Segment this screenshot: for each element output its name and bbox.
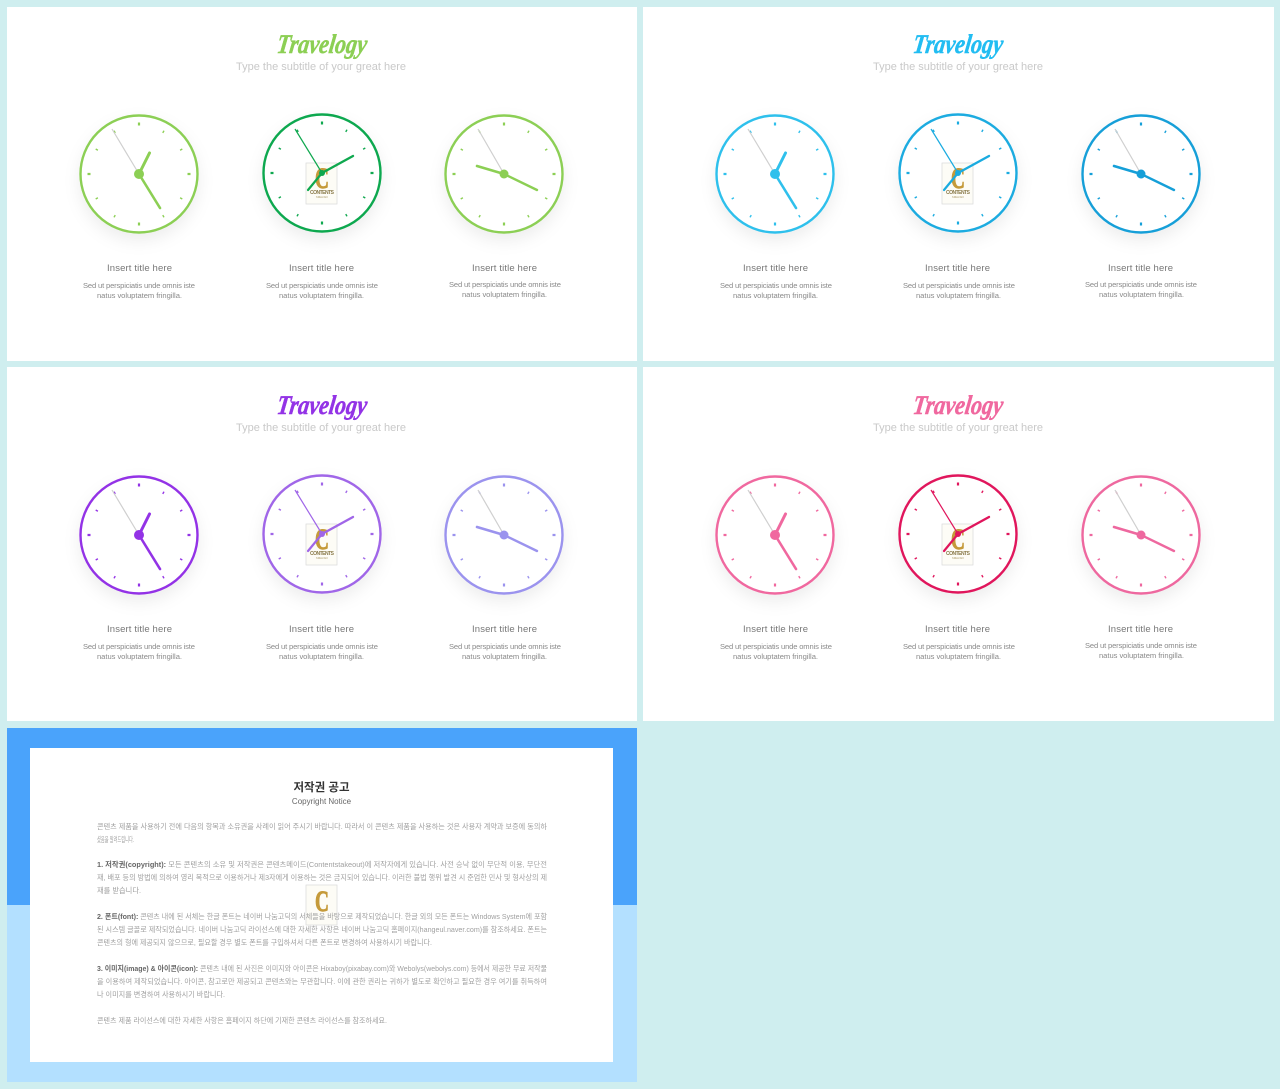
clock 2 text: natus voluptatem fringilla. xyxy=(916,291,1001,300)
clock 3 text xyxy=(1085,280,1197,299)
clock 1 xyxy=(80,116,198,232)
title: Travelogy xyxy=(275,390,370,420)
copyright heading: 저작권 공고 xyxy=(293,780,350,794)
intro paragraph xyxy=(97,821,547,844)
logo watermark: CONTENTS xyxy=(310,551,335,557)
logo watermark xyxy=(942,523,973,565)
clock 3 text xyxy=(449,642,561,661)
clock 3 text: natus voluptatem fringilla. xyxy=(462,290,547,299)
clock 1 label: Insert title here xyxy=(107,624,172,635)
copyright subheading: Copyright Notice xyxy=(292,797,352,806)
clock 3 label: Insert title here xyxy=(472,263,537,274)
section 3: image and icon xyxy=(97,963,547,999)
clock 1 text: Sed ut perspiciatis unde omnis iste xyxy=(83,642,195,651)
clock 1 label: Insert title here xyxy=(743,624,808,635)
clock 1 text: natus voluptatem fringilla. xyxy=(97,652,182,661)
logo watermark: C xyxy=(315,162,329,195)
panel: green clocks xyxy=(7,7,637,361)
logo watermark: C xyxy=(315,523,329,556)
clock 3 text xyxy=(449,280,561,299)
clock 3 text: natus voluptatem fringilla. xyxy=(462,652,547,661)
clock 3 xyxy=(446,116,562,232)
panel: copyright notice xyxy=(7,728,637,1082)
clock 2 text xyxy=(266,642,378,661)
section 3: image and icon: 나 이미지를 변경하여 사용하시기 바랍니다. xyxy=(97,989,225,999)
clock 2 text: natus voluptatem fringilla. xyxy=(279,291,364,300)
clock 3 label: Insert title here xyxy=(472,624,537,635)
clock 2 label: Insert title here xyxy=(925,263,990,274)
section 3: image and icon: 을 이용하여 제작되었습니다. 아이콘, 참고로만 제공되고 콘텐츠와는 무관합니다. 이에 관한 권리는 귀하가 별도로 확인하고 필요한 경우 여기를 취득하여 xyxy=(97,976,547,986)
clock 3 text: natus voluptatem fringilla. xyxy=(1099,290,1184,299)
clock 1 text: natus voluptatem fringilla. xyxy=(733,652,818,661)
clock 1 text xyxy=(83,642,195,661)
clock 1 text: natus voluptatem fringilla. xyxy=(733,291,818,300)
clock 1 text xyxy=(83,281,195,300)
clock 1 label: Insert title here xyxy=(743,263,808,274)
clock 1 text: Sed ut perspiciatis unde omnis iste xyxy=(720,642,832,651)
clock 3 xyxy=(1082,476,1200,594)
panel: purple clocks xyxy=(7,367,637,721)
title: Travelogy xyxy=(911,390,1006,420)
logo watermark: MAIL LOGO xyxy=(316,556,329,560)
clock 1 text xyxy=(720,642,832,661)
section 2: font xyxy=(97,911,547,947)
intro paragraph: 콘텐츠 제품을 사용하기 전에 다음의 항목과 소유권을 사례이 읽어 주시기 바랍니다. 따라서 이 콘텐츠 제품을 사용하는 것은 사용자 계약과 보증에 동의하 xyxy=(97,821,547,831)
clock 2 text: Sed ut perspiciatis unde omnis iste xyxy=(266,281,378,290)
clock 3 text: Sed ut perspiciatis unde omnis iste xyxy=(1085,641,1197,650)
clock 3 text xyxy=(1085,641,1197,660)
clock 1 text: Sed ut perspiciatis unde omnis iste xyxy=(720,281,832,290)
subtitle: Type the subtitle of your great here xyxy=(236,422,406,434)
clock 2 text: Sed ut perspiciatis unde omnis iste xyxy=(266,642,378,651)
logo watermark: CONTENTS xyxy=(946,551,971,557)
clock 2 xyxy=(264,476,380,592)
clock 2 text: natus voluptatem fringilla. xyxy=(279,652,364,661)
clock 1 text xyxy=(720,281,832,300)
clock 2 xyxy=(900,476,1016,592)
logo watermark: MAIL LOGO xyxy=(952,556,965,560)
section 1: copyright: 재, 배포 등의 방법에 의하여 영리 목적으로 이용하거나 제3자에게 이용하는 것은 금지되어 있습니다. 이러한 불법 행위 발견 시 준엄한 민사 및 형사상의 제 xyxy=(97,872,547,882)
clock 2 text: Sed ut perspiciatis unde omnis iste xyxy=(903,642,1015,651)
subtitle: Type the subtitle of your great here xyxy=(236,61,406,73)
clock 1 text: Sed ut perspiciatis unde omnis iste xyxy=(83,281,195,290)
clock 3 text: Sed ut perspiciatis unde omnis iste xyxy=(449,642,561,651)
logo watermark: C xyxy=(951,523,965,556)
clock 2 text: natus voluptatem fringilla. xyxy=(916,652,1001,661)
closing line: 콘텐츠 제품 라이선스에 대한 자세한 사항은 홈페이지 하단에 기재한 콘텐츠 라이선스를 참조하세요. xyxy=(97,1015,387,1025)
clock 3 xyxy=(446,476,562,594)
clock 3 text: Sed ut perspiciatis unde omnis iste xyxy=(1085,280,1197,289)
section 3: image and icon: 3. 이미지(image) & 아이콘(icon): 콘텐츠 내에 된 사진은 이미지와 아이콘은 Hixaboy(pixabay.com)와 Webolys(webolys.com) 등에서 제공한 무료 저작물 xyxy=(97,963,547,973)
clock 2 text xyxy=(903,281,1015,300)
section 1: copyright xyxy=(97,859,547,895)
clock 1 xyxy=(716,116,834,232)
panel: blue clocks xyxy=(643,7,1274,361)
logo watermark xyxy=(942,162,973,204)
logo watermark xyxy=(306,885,337,925)
intro paragraph: 셨음을 알려드립니다. xyxy=(97,834,134,844)
clock 1 xyxy=(80,476,198,594)
clock 2 text: Sed ut perspiciatis unde omnis iste xyxy=(903,281,1015,290)
section 2: font: 2. 폰트(font): 콘텐츠 내에 된 서체는 한글 폰트는 네이버 나눔고딕의 서체들을 바탕으로 제작되었습니다. 한글 외의 모든 폰트는 Windows System에 포함 xyxy=(97,911,547,921)
title: Travelogy xyxy=(911,29,1006,59)
title: Travelogy xyxy=(275,29,370,59)
clock 1 xyxy=(716,476,834,594)
clock 1 label: Insert title here xyxy=(107,263,172,274)
clock 3 text: natus voluptatem fringilla. xyxy=(1099,651,1184,660)
clock 3 label: Insert title here xyxy=(1108,263,1173,274)
subtitle: Type the subtitle of your great here xyxy=(873,61,1043,73)
logo watermark: CONTENTS xyxy=(310,190,335,196)
section 2: font: 콘텐츠의 형에 제공되지 않으므로, 필요할 경우 별도 폰트를 구입하셔서 다른 폰트로 변경하여 사용하시기 바랍니다. xyxy=(97,937,432,947)
clock 3 xyxy=(1082,116,1200,232)
logo watermark xyxy=(306,523,337,565)
section 1: copyright: 1. 저작권(copyright): 모든 콘텐츠의 소유 및 저작권은 콘텐츠메이드(Contentstakeout)에 저작자에게 있습니다. 사전 승낙 없이 무단적 이용, 무단전 xyxy=(97,859,547,869)
clock 2 xyxy=(264,114,380,232)
clock 3 label: Insert title here xyxy=(1108,624,1173,635)
clock 2 xyxy=(900,114,1016,232)
logo watermark xyxy=(306,162,337,204)
logo watermark: C xyxy=(315,885,329,918)
clock 2 label: Insert title here xyxy=(289,263,354,274)
clock 2 text xyxy=(903,642,1015,661)
clock 2 label: Insert title here xyxy=(289,624,354,635)
clock 1 text: natus voluptatem fringilla. xyxy=(97,291,182,300)
logo watermark: MAIL LOGO xyxy=(316,195,329,199)
clock 2 text xyxy=(266,281,378,300)
logo watermark: MAIL LOGO xyxy=(952,195,965,199)
section 1: copyright: 재를 받습니다. xyxy=(97,885,141,895)
section 2: font: 된 시스템 글꼴로 제작되었습니다. 네이버 나눔고딕 라이선스에 대한 자세한 사항은 네이버 나눔고딕 홈페이지(hangeul.naver.com)를 참조하세요. 폰트는 xyxy=(97,924,547,934)
panel: pink clocks xyxy=(643,367,1274,721)
clock 3 text: Sed ut perspiciatis unde omnis iste xyxy=(449,280,561,289)
logo watermark: C xyxy=(951,162,965,195)
subtitle: Type the subtitle of your great here xyxy=(873,422,1043,434)
logo watermark: CONTENTS xyxy=(946,190,971,196)
clock 2 label: Insert title here xyxy=(925,624,990,635)
